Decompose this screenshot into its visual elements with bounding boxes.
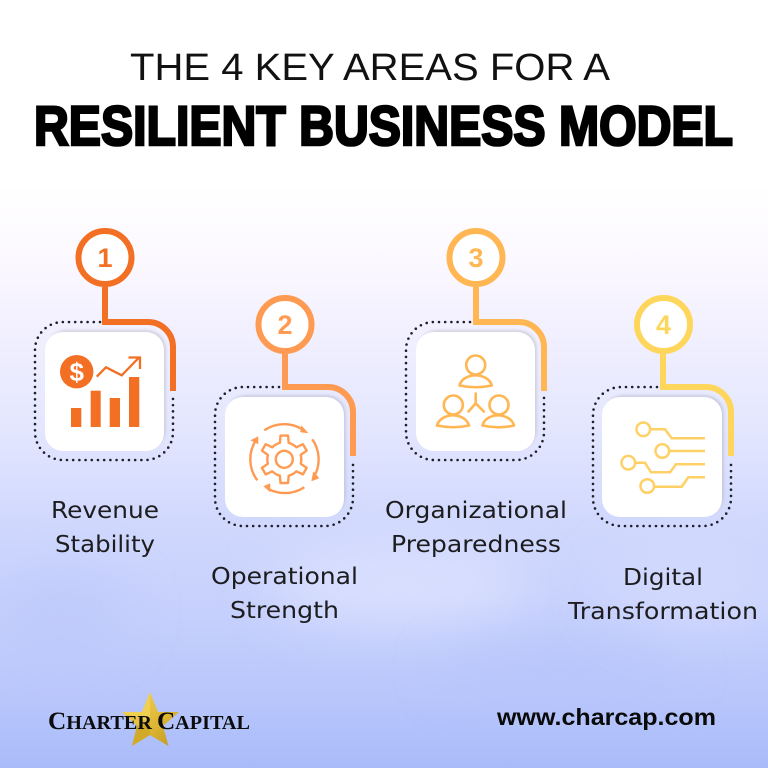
logo: Charter Capital <box>48 692 250 746</box>
label 3: Preparedness <box>391 532 561 558</box>
icon: gold star <box>122 692 179 746</box>
icon: team hierarchy <box>437 356 514 427</box>
icon: circuit lines <box>622 422 705 493</box>
label 2: Operational <box>211 564 358 590</box>
panel: step 4 digital transformation <box>567 298 758 625</box>
connector 3 <box>476 287 544 391</box>
white card 3 <box>416 332 535 451</box>
icon: revenue chart: $ <box>69 357 84 387</box>
dotted frame 4 <box>593 387 731 526</box>
logo wordmark: CHARTER CAPITAL <box>48 708 250 735</box>
white card 4 <box>602 397 722 517</box>
number badge 3 <box>450 231 502 284</box>
connector 1 <box>105 287 173 391</box>
title <box>34 47 733 157</box>
number badge 4 <box>637 298 690 351</box>
number badge 3: 3 <box>468 243 484 273</box>
label 3: Organizational <box>385 498 567 524</box>
title line 1: THE 4 KEY AREAS FOR A <box>130 47 611 89</box>
white card 1 <box>45 332 164 451</box>
label 4: Digital <box>623 565 703 591</box>
website url: www.charcap.com <box>496 704 716 730</box>
number badge 1 <box>78 231 132 284</box>
panel: step 1 revenue stability <box>35 231 173 558</box>
label 1 <box>51 498 159 558</box>
label 3 <box>385 498 567 558</box>
connector 4 <box>663 354 731 456</box>
number badge 2: 2 <box>277 310 293 340</box>
dotted frame 2 <box>215 387 353 526</box>
label 1: Stability <box>55 532 155 558</box>
dotted frame 3 <box>406 322 544 460</box>
icon: revenue chart <box>60 355 140 427</box>
label 4 <box>567 565 758 625</box>
number badge 2 <box>258 298 312 351</box>
dotted frame 1 <box>35 322 173 460</box>
label 2: Strength <box>230 598 339 624</box>
panel: step 3 organizational preparedness <box>385 231 567 558</box>
icon: gear with cycle arrows <box>250 424 319 493</box>
panel: step 2 operational strength <box>211 298 358 624</box>
number badge 1: 1 <box>97 243 113 273</box>
label 4: Transformation <box>567 599 758 625</box>
number badge 4: 4 <box>656 310 671 340</box>
label 1: Revenue <box>51 498 159 524</box>
white card 2 <box>225 397 344 517</box>
connector 2 <box>285 354 353 456</box>
label 2 <box>211 564 358 624</box>
